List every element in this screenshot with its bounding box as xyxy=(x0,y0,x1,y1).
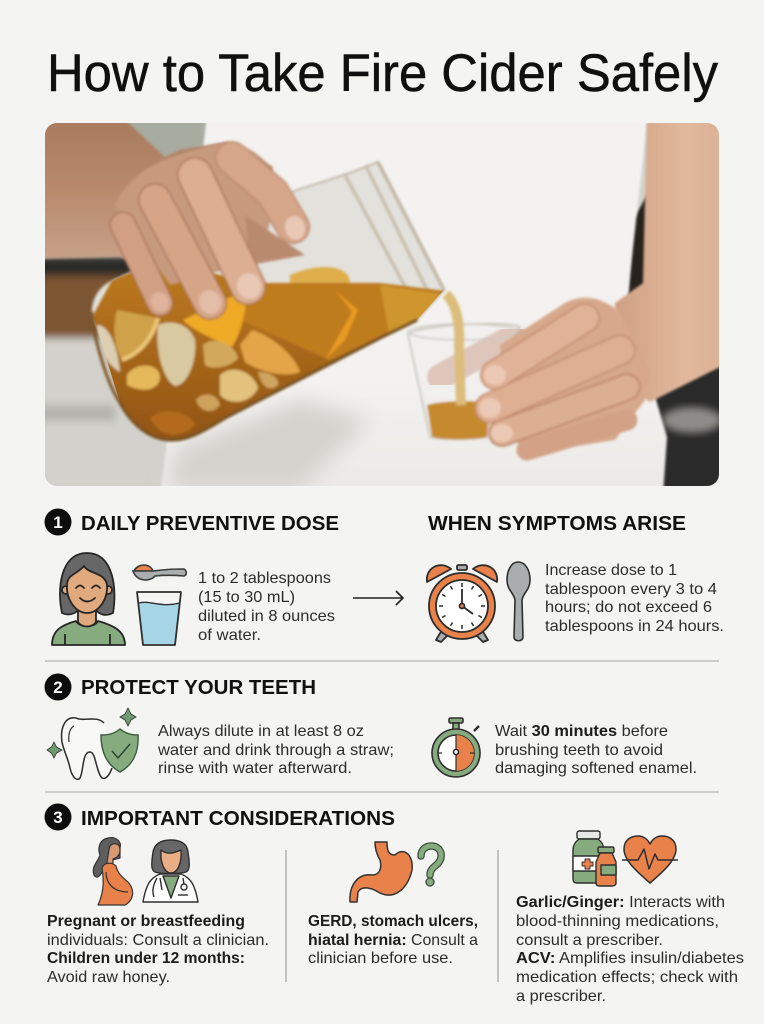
right hand fingers xyxy=(479,298,650,452)
text: GERD and ulcers xyxy=(308,913,478,967)
lemon and ginger pieces xyxy=(114,310,158,360)
right arm xyxy=(614,123,719,403)
photo: pouring fire cider from a jar into a small cup xyxy=(35,115,730,495)
text: GERD and ulcers: clinician before use. xyxy=(308,950,453,967)
text: dilute and use a straw xyxy=(157,723,394,777)
text: drug interactions: a prescriber. xyxy=(516,988,606,1005)
icon: tooth with shield and sparkles xyxy=(47,708,138,779)
text: daily dose: diluted in 8 ounces xyxy=(198,608,335,625)
text: daily dose: (15 to 30 mL) xyxy=(198,589,295,606)
icon: pregnant woman xyxy=(93,838,133,905)
text: wait before brushing xyxy=(495,723,697,777)
text: when symptoms arise xyxy=(545,562,724,635)
heading: daily preventive dose: DAILY PREVENTIVE DOSE xyxy=(81,513,339,535)
icon: heart with pulse line xyxy=(622,836,678,883)
text: dilute and use a straw: Always dilute in at least 8 oz xyxy=(158,723,364,740)
icon: smiling woman xyxy=(52,553,125,645)
text: when symptoms arise: tablespoon every 3 to 4 xyxy=(545,581,717,598)
thumb behind cup xyxy=(440,337,513,377)
arrow xyxy=(353,591,403,605)
cup xyxy=(408,294,520,439)
dark background at right xyxy=(627,194,719,486)
icon: stomach xyxy=(350,842,412,902)
text: GERD and ulcers: hiatal hernia: Consult a xyxy=(308,932,478,949)
shirt xyxy=(160,115,667,495)
section 1 number badge: 1 xyxy=(53,513,63,532)
title: How to Take Fire Cider Safely xyxy=(47,44,718,103)
text: pregnant, breastfeeding and infants: Children under 12 months: xyxy=(47,950,245,967)
icon: doctor xyxy=(143,840,198,902)
jar glass xyxy=(92,162,444,440)
text: GERD and ulcers: GERD, stomach ulcers, xyxy=(308,913,478,930)
text: drug interactions xyxy=(516,894,744,1005)
text: pregnant, breastfeeding and infants: individuals: Consult a clinician. xyxy=(47,932,269,949)
liquid xyxy=(92,268,444,440)
text: when symptoms arise: Increase dose to 1 xyxy=(545,562,677,579)
section 1 number badge xyxy=(44,508,72,536)
icon: upright spoon xyxy=(507,562,530,641)
text: when symptoms arise: hours; do not exceed 6 xyxy=(545,599,712,616)
icon: tablespoon with powder xyxy=(133,565,186,580)
text: drug interactions: blood-thinning medications, xyxy=(516,913,719,930)
heading: protect your teeth: PROTECT YOUR TEETH xyxy=(81,677,316,699)
text: pregnant, breastfeeding and infants xyxy=(47,913,269,986)
icon: alarm clock xyxy=(427,565,497,642)
text: wait before brushing: damaging softened enamel. xyxy=(495,760,697,777)
left arm xyxy=(45,123,274,260)
heading: important considerations: IMPORTANT CONSIDERATIONS xyxy=(81,808,395,830)
heading: when symptoms arise: WHEN SYMPTOMS ARISE xyxy=(428,513,686,535)
icon: medication bottles xyxy=(573,831,616,886)
text: daily dose: 1 to 2 tablespoons xyxy=(198,570,331,587)
text: drug interactions: ACV: Amplifies insulin/diabetes xyxy=(516,950,744,967)
text: dilute and use a straw: rinse with water afterward. xyxy=(158,760,352,777)
text: drug interactions: medication effects; check with xyxy=(516,969,738,986)
section 3 number badge: 3 xyxy=(53,808,63,827)
text: drug interactions: Garlic/Ginger: Interacts with xyxy=(516,894,725,911)
text: pregnant, breastfeeding and infants: Avoid raw honey. xyxy=(47,969,170,986)
text: dilute and use a straw: water and drink through a straw; xyxy=(157,742,394,759)
text: daily dose xyxy=(198,570,335,644)
section 2 number badge: 2 xyxy=(53,678,63,697)
section 3 number badge xyxy=(44,804,72,830)
section 2 number badge xyxy=(44,674,72,700)
text: when symptoms arise: tablespoons in 24 hours. xyxy=(545,618,724,635)
text: wait before brushing: Wait 30 minutes before xyxy=(495,723,668,740)
text: wait before brushing: brushing teeth to avoid xyxy=(495,742,663,759)
icon: stopwatch xyxy=(432,718,480,777)
icon: glass of water xyxy=(137,592,181,645)
text: drug interactions: consult a prescriber. xyxy=(516,932,663,949)
icon: question mark xyxy=(421,846,441,886)
text: daily dose: of water. xyxy=(198,627,261,644)
left hand fingers xyxy=(115,142,308,318)
text: pregnant, breastfeeding and infants: Pregnant or breastfeeding xyxy=(47,913,245,930)
